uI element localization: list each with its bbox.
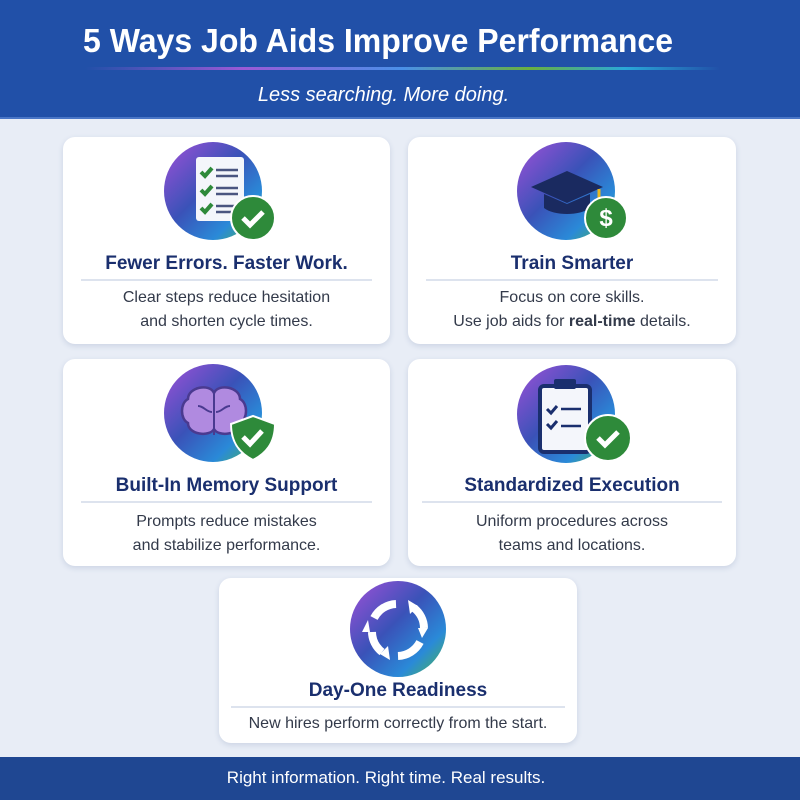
text: Clear steps reduce hesitation [123,289,330,306]
text: Use job aids for real-time details. [453,313,691,330]
footer text: Right information. Right time. Real results. [227,768,545,787]
text: Focus on core skills. [500,289,644,306]
text: New hires perform correctly from the start. [249,715,547,732]
text: Uniform procedures across [476,513,668,530]
text: and stabilize performance. [133,537,320,554]
title: 5 Ways Job Aids Improve Performance [83,22,673,59]
panel: standardized execution [408,359,736,566]
header [0,0,800,119]
heading: Standardized Execution [464,475,680,496]
text: and shorten cycle times. [140,313,313,330]
icon: clipboard [517,365,630,463]
text [453,289,691,330]
text [476,513,668,554]
heading: Day-One Readiness [309,680,487,701]
icon: graduation cap: $ [599,205,613,232]
heading: Train Smarter [511,253,633,274]
icon: brain shield [164,364,274,462]
text: teams and locations. [499,537,645,554]
subtitle: Less searching. More doing. [258,84,509,106]
footer [0,757,800,800]
panel: fewer errors [63,137,390,344]
panel: day-one readiness [219,578,577,743]
icon: cycle arrows [350,581,446,677]
text [133,513,320,554]
heading: Fewer Errors. Faster Work. [105,253,348,274]
panel: memory support [63,359,390,566]
panel: train smarter [408,137,736,344]
gradient line [96,67,711,70]
icon: checklist [164,142,274,240]
text: Prompts reduce mistakes [136,513,317,530]
text [123,289,330,330]
heading: Built-In Memory Support [116,475,337,496]
icon: graduation cap [517,142,626,240]
